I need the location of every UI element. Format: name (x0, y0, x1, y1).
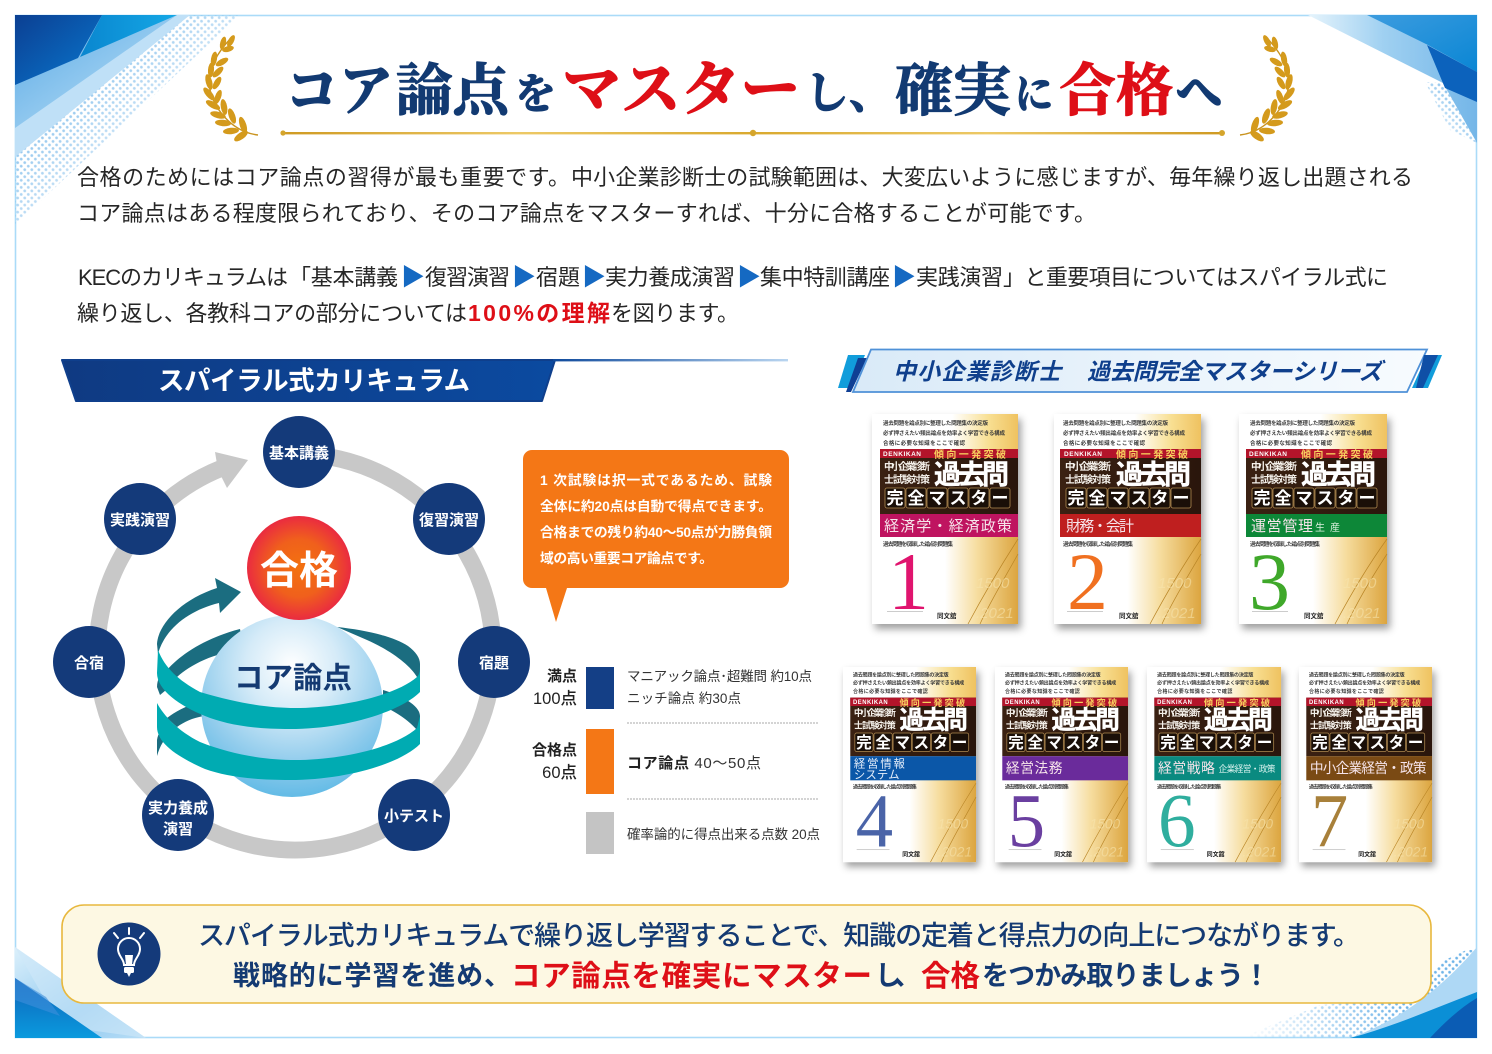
node: 実力養成演習: 演習 (163, 820, 193, 838)
node: 小テスト (378, 779, 450, 851)
book 4: .2021 (938, 844, 972, 860)
title: に (1015, 61, 1053, 120)
intro paragraph 2: 」と重要項目についてはスパイラル式に (1003, 265, 1388, 290)
orange callout (523, 450, 789, 622)
section heading: past exam master series: 中小企業診断士 (893, 358, 1064, 384)
book 4: 士試験対策 (854, 719, 896, 730)
book 3: 必ず押さえたい頻出論点を効率よく学習できる構成 (1250, 429, 1372, 437)
summary line 2: 戦略的に学習を進め、 (233, 961, 511, 991)
book 4: 完 (856, 734, 872, 752)
book 7: DENKIKAN (1309, 700, 1344, 706)
book 4: マ (894, 735, 910, 752)
book 5: タ (1085, 734, 1100, 752)
book 7 (1299, 667, 1432, 863)
book 6: 6 (1158, 780, 1196, 863)
node: 実践演習 (104, 483, 176, 555)
book 6: .2021 (1242, 843, 1277, 860)
book 1: 過去問 (934, 460, 1009, 490)
intro paragraph 2: 復習演習 (425, 265, 510, 290)
book 3: 運営管理 (1251, 517, 1313, 535)
book 1: .2021 (976, 605, 1014, 622)
intro paragraph 2: 実践演習 (916, 265, 1003, 290)
book 4: 過去問題を収録した論点別問題集 (853, 784, 917, 791)
note: maniac and niche points: マニアック論点･超難問 約10点 (627, 668, 812, 684)
intro paragraph 2: ▶ (582, 264, 606, 291)
bar: core segment (586, 729, 614, 794)
book 4: 中小企業診断 (854, 707, 896, 718)
intro paragraph 2: 100%の理解 (468, 300, 610, 326)
book 6: 傾向一発突破 (1204, 697, 1270, 708)
book 5: .2021 (1090, 844, 1124, 860)
icon: light bulb (98, 922, 160, 986)
book 7: .2021 (1394, 844, 1428, 860)
book 7: 士試験対策 (1310, 719, 1352, 730)
book 6 (1147, 667, 1281, 863)
curriculum cycle diagram (53, 416, 530, 851)
summary line 2 (233, 960, 1270, 993)
book 5: 同文舘 (1054, 850, 1072, 859)
goal circle (247, 516, 351, 620)
book 1: 経済学・経済政策 (884, 518, 1012, 535)
book 6: 過去問 (1204, 706, 1273, 734)
book 3: マ (1296, 489, 1312, 508)
book 7: 全 (1331, 733, 1347, 752)
book 3: 中小企業診断 (1251, 460, 1297, 473)
book 6: 1500 (1242, 816, 1273, 832)
book 1: 1500 (976, 575, 1010, 592)
book 4: ー (952, 735, 967, 752)
cycle ring with arrow (97, 452, 493, 850)
book 7: 7 (1311, 780, 1348, 863)
spiral front bands (157, 650, 420, 780)
note: core points: コア論点 40～50点 (627, 754, 761, 772)
title: へ (1176, 56, 1222, 122)
book 3: 士試験対策 (1251, 473, 1297, 486)
book 3: .2021 (1343, 605, 1381, 622)
laurel left (201, 34, 258, 143)
book 3: 過去問 (1301, 460, 1376, 490)
book 1: 過去問題を収録した論点別問題集 (883, 540, 953, 548)
book 7: 中小企業診断 (1310, 707, 1352, 718)
title (285, 42, 1222, 128)
book 7: マ (1350, 735, 1366, 752)
score label: full marks (533, 667, 577, 708)
orange callout: 域の高い重要コア論点です。 (540, 550, 713, 566)
book 4: 同文舘 (902, 850, 920, 859)
note: maniac and niche points: ニッチ論点 約30点 (627, 690, 741, 706)
book 1: 傾向一発突破 (934, 448, 1006, 461)
book 3: タ (1338, 489, 1354, 508)
book 1: タ (970, 489, 988, 508)
book 5: ー (1104, 735, 1119, 752)
book 6: 必ず押さえたい頻出論点を効率よく学習できる構成 (1157, 680, 1269, 687)
book 1: 全 (908, 489, 924, 508)
book 3: 生産 (1315, 521, 1340, 534)
book 7: 中小企業経営・政策 (1310, 760, 1427, 776)
book 2: 全 (1088, 489, 1106, 508)
bar: top segment (586, 667, 614, 709)
book 5: 過去問 (1051, 706, 1120, 734)
bottom summary panel (62, 905, 1431, 1003)
section heading: past exam master series: 過去問完全マスターシリーズ (1087, 358, 1386, 384)
corner decoration: bottom left (15, 947, 146, 1038)
book 7: 完 (1312, 734, 1328, 752)
book 5: 経営法務 (1006, 761, 1063, 776)
book 6: マ (1199, 735, 1214, 752)
book 6: 企業経営・政策 (1219, 763, 1276, 774)
book 1: 合格に必要な知識をここで確認 (883, 439, 965, 447)
corner decoration: top right (1308, 15, 1477, 143)
book 6: 過去問題を収録した論点別問題集 (1157, 784, 1221, 791)
note: maniac and niche points (627, 668, 812, 706)
book 6: ス (1218, 735, 1234, 752)
book 3: 3 (1249, 536, 1290, 627)
book 7: 過去問題を論点別に整理した問題集の決定版 (1309, 671, 1405, 678)
section heading: spiral curriculum: スパイラル式カリキュラム (158, 366, 470, 396)
book 6: 合格に必要な知識をここで確認 (1157, 688, 1232, 695)
intro paragraph 2: 集中特訓講座 (760, 265, 890, 290)
book 5: 傾向一発突破 (1051, 697, 1117, 708)
node: 基本講義: 基本講義 (269, 444, 329, 462)
section heading: past exam master series (838, 350, 1442, 392)
book 3: 傾向一発突破 (1301, 448, 1373, 461)
book 7: タ (1389, 734, 1404, 752)
intro paragraph 2: 宿題 (536, 265, 580, 290)
book 2: 1500 (1158, 575, 1192, 592)
book 6: 過去問題を論点別に整理した問題集の決定版 (1157, 671, 1253, 678)
goal circle: 合格 (260, 550, 338, 593)
node: 合宿: 合宿 (74, 655, 104, 672)
intro paragraph 2: 実力養成演習 (605, 265, 735, 290)
book 5: 合格に必要な知識をここで確認 (1005, 688, 1080, 695)
book 2: マ (1110, 489, 1126, 508)
book 4 (843, 667, 976, 863)
book 1: 完 (886, 489, 904, 508)
book 6: 経営戦略 (1158, 760, 1215, 776)
book 3: ー (1358, 489, 1376, 508)
orange callout: 全体に約20点は自動で得点できます。 (540, 498, 772, 514)
book 3: 1500 (1343, 575, 1377, 592)
book 5: 全 (1027, 733, 1043, 752)
intro paragraph 1: 中小企業診断士の試験範囲は、大変広いように感じますが、毎年繰り返し出題される (571, 165, 1413, 190)
book 3: 合格に必要な知識をここで確認 (1250, 439, 1332, 447)
node: 実力養成演習: 実力養成 (148, 799, 208, 817)
book 4: 傾向一発突破 (899, 697, 965, 708)
book 4: DENKIKAN (853, 700, 888, 706)
book 2: 同文舘 (1119, 611, 1139, 620)
book 7: 傾向一発突破 (1355, 697, 1421, 708)
book 6: 中小企業診断 (1158, 707, 1200, 718)
book 5: 5 (1008, 780, 1045, 863)
book 5: 1500 (1090, 817, 1120, 832)
node: 小テスト: 小テスト (384, 808, 444, 825)
node: 復習演習: 復習演習 (419, 511, 479, 529)
book 5: 過去問題を論点別に整理した問題集の決定版 (1005, 671, 1101, 678)
intro paragraph 2: ▶ (401, 264, 425, 291)
book 7: ー (1408, 735, 1423, 752)
book 7: 同文舘 (1358, 850, 1376, 859)
book 5: 中小企業診断 (1006, 707, 1048, 718)
book 2: 合格に必要な知識をここで確認 (1063, 439, 1145, 447)
book 4: 過去問 (899, 706, 968, 734)
book 4: 4 (856, 780, 893, 863)
note: probability points: 確率論的に得点出来る点数 20点 (627, 826, 820, 842)
book 4: ス (914, 735, 929, 752)
intro paragraph 1: 合格のためにはコア論点の習得が最も重要です。 (77, 165, 570, 190)
section heading: spiral curriculum (62, 359, 788, 401)
book 1 (872, 414, 1018, 627)
book 5: 完 (1008, 734, 1024, 752)
title: し、 (805, 57, 893, 121)
orange callout: 合格までの残り約40～50点が力勝負領 (540, 524, 772, 540)
intro paragraph 2: ▶ (737, 264, 761, 291)
summary line 2: をつかみ取りましょう！ (982, 961, 1270, 991)
book 6: タ (1237, 734, 1253, 752)
book 6: 全 (1180, 733, 1195, 752)
book 1: ス (950, 489, 966, 508)
book 2: ー (1172, 489, 1190, 508)
node: 実力養成演習 (142, 779, 214, 851)
book 2: 過去問題を論点別に整理した問題集の決定版 (1063, 419, 1168, 427)
book 1: 1 (888, 536, 929, 627)
laurel right (1240, 34, 1297, 143)
book 7: 過去問 (1355, 706, 1424, 734)
spiral back bands (157, 627, 420, 756)
score label: full marks: 満点 (547, 667, 577, 685)
book 5: 士試験対策 (1006, 719, 1048, 730)
book 1: 過去問題を論点別に整理した問題集の決定版 (883, 419, 988, 427)
node: 実践演習: 実践演習 (110, 511, 170, 529)
book 1: 士試験対策 (884, 473, 930, 486)
corner decoration: top left (15, 15, 240, 225)
book 2: 過去問題を収録した論点別問題集 (1063, 540, 1133, 548)
book 4: 必ず押さえたい頻出論点を効率よく学習できる構成 (853, 680, 964, 687)
node: 基本講義 (263, 416, 335, 488)
book 4: 1500 (938, 817, 968, 832)
book 5 (995, 667, 1128, 863)
book 6: ー (1257, 735, 1272, 752)
book 4: 過去問題を論点別に整理した問題集の決定版 (853, 671, 949, 678)
book 2: ス (1130, 489, 1148, 508)
book 5: DENKIKAN (1005, 700, 1040, 706)
book 2: 傾向一発突破 (1116, 448, 1188, 461)
book 1: ー (992, 489, 1008, 508)
book 7: 合格に必要な知識をここで確認 (1309, 688, 1384, 695)
score label: full marks: 100点 (533, 689, 577, 708)
node: 合宿 (53, 626, 125, 698)
intro paragraph 1 (77, 165, 1413, 226)
book 2: DENKIKAN (1064, 451, 1102, 458)
book 2: 2 (1067, 536, 1108, 627)
book 4: 経営情報 (854, 756, 905, 770)
book 3: 同文舘 (1304, 611, 1324, 620)
intro paragraph 2: 「基本講義 (289, 265, 398, 290)
book 1: マ (928, 489, 946, 508)
corner decoration: bottom right (1240, 945, 1477, 1038)
book 1: 中小企業診断 (884, 460, 930, 473)
score label: pass mark (532, 741, 577, 782)
book 3: DENKIKAN (1249, 451, 1287, 458)
title: 確実 (895, 45, 1011, 127)
book 4: システム (854, 768, 899, 782)
intro paragraph 2: KECのカリキュラムは (78, 265, 288, 290)
book 5: 過去問題を収録した論点別問題集 (1005, 784, 1069, 791)
intro paragraph 2: ▶ (512, 264, 536, 291)
core label: コア論点 (234, 662, 352, 695)
book 4: 全 (875, 733, 891, 752)
book 5: ス (1066, 735, 1081, 752)
bar: probability segment (586, 812, 614, 854)
book 5: 必ず押さえたい頻出論点を効率よく学習できる構成 (1005, 680, 1116, 687)
book 1: 必ず押さえたい頻出論点を効率よく学習できる構成 (883, 429, 1005, 437)
book 2: 完 (1068, 489, 1084, 508)
book 6: DENKIKAN (1157, 700, 1192, 706)
book 2: 過去問 (1116, 460, 1191, 490)
book 4: 合格に必要な知識をここで確認 (853, 688, 928, 695)
book 2: .2021 (1158, 605, 1196, 622)
book 3: 全 (1274, 489, 1292, 508)
title underline (280, 130, 1225, 136)
intro paragraph 2: ▶ (892, 264, 916, 291)
summary line 2: コア論点を確実にマスター (511, 960, 872, 993)
node: 宿題 (458, 626, 530, 698)
book 6: 士試験対策 (1158, 719, 1200, 730)
book 6: 完 (1160, 734, 1176, 752)
book 3: 過去問題を論点別に整理した問題集の決定版 (1250, 419, 1355, 427)
book 3: 完 (1254, 489, 1270, 508)
book 7: 1500 (1394, 817, 1424, 832)
book 2: 中小企業診断 (1065, 460, 1111, 473)
node: 復習演習 (413, 483, 485, 555)
intro paragraph 2 (77, 264, 1388, 326)
title: マスター (562, 42, 800, 128)
book 7: ス (1370, 735, 1385, 752)
book 3 (1239, 414, 1387, 627)
book 2: 士試験対策 (1065, 473, 1111, 486)
book 1: DENKIKAN (883, 451, 921, 458)
book 2: 必ず押さえたい頻出論点を効率よく学習できる構成 (1063, 429, 1185, 437)
intro paragraph 1: コア論点はある程度限られており、そのコア論点をマスターすれば、十分に合格することが可能です。 (77, 201, 1096, 226)
book 1: 同文舘 (937, 611, 957, 620)
book 2: タ (1152, 489, 1168, 508)
summary line 2: し、 (875, 961, 921, 991)
book 3: ス (1316, 489, 1334, 508)
book 5: マ (1046, 735, 1062, 752)
book 7: 必ず押さえたい頻出論点を効率よく学習できる構成 (1309, 680, 1420, 687)
book 4: タ (933, 734, 948, 752)
score breakdown chart (532, 667, 820, 854)
score label: pass mark: 合格点 (532, 741, 577, 759)
intro paragraph 2: 繰り返し、各教科コアの部分については (77, 301, 467, 326)
rising arrow (157, 578, 241, 654)
book 3: 過去問題を収録した論点別問題集 (1250, 540, 1320, 548)
score label: pass mark: 60点 (542, 763, 577, 782)
book 2 (1054, 414, 1201, 627)
book 2: 財務・会計 (1066, 518, 1134, 535)
title: 論点 (396, 47, 513, 127)
orange callout: 1 次試験は択一式であるため、試験 (540, 472, 772, 488)
title: 合格 (1059, 45, 1173, 127)
summary line 2: 合格 (921, 960, 980, 993)
book 6: 同文舘 (1207, 850, 1225, 859)
intro paragraph 2: を図ります。 (611, 301, 739, 326)
title: コア (285, 47, 393, 127)
core sphere (201, 615, 383, 797)
node: 宿題: 宿題 (479, 655, 509, 672)
book 7: 過去問題を収録した論点別問題集 (1309, 784, 1373, 791)
summary line 1: スパイラル式カリキュラムで繰り返し学習することで、知識の定着と得点力の向上につながります。 (198, 921, 1360, 951)
title: を (515, 61, 556, 120)
